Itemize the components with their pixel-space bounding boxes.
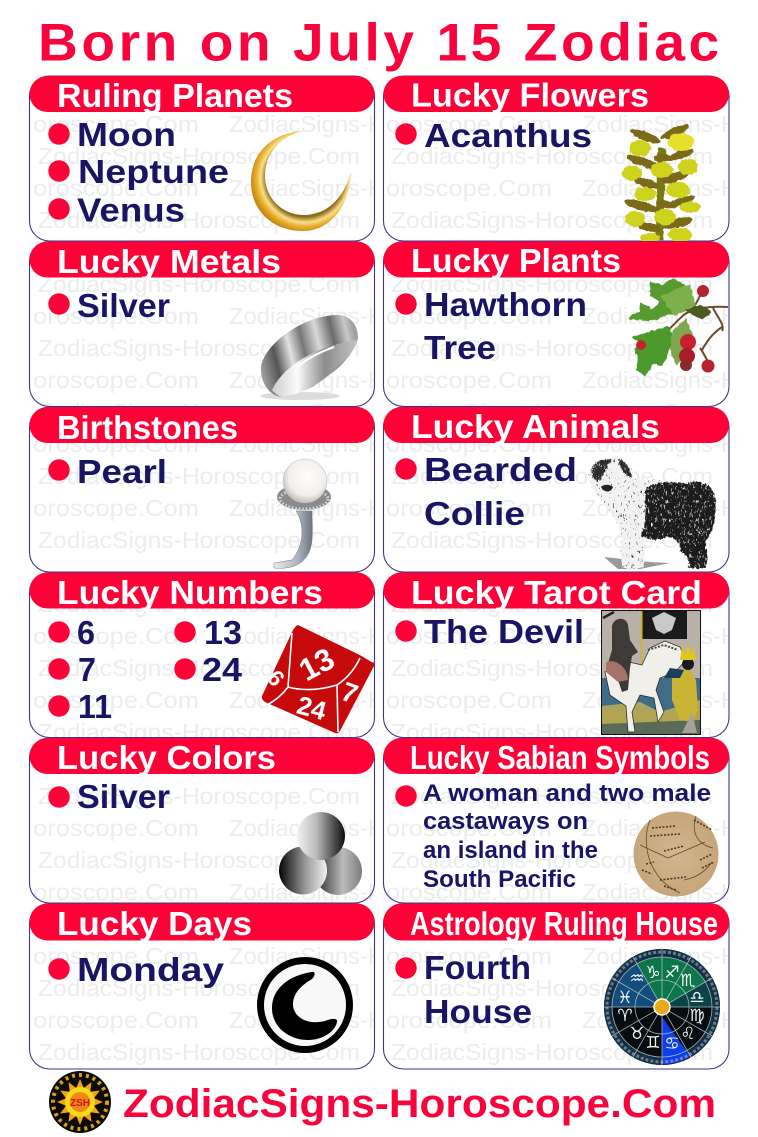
icon: hawthorn branch [627, 278, 728, 376]
panel: lucky days [30, 904, 374, 1069]
list: numbers [48, 614, 243, 725]
watermark text pattern: ZodiacSigns-Horoscope.Com [391, 271, 713, 297]
icon: astrology chart [634, 812, 718, 896]
heading: lucky flowers [384, 76, 729, 114]
heading: ruling planets [30, 76, 374, 114]
icon: red dice: 13 [293, 641, 340, 688]
icon: tarot card [602, 610, 700, 734]
watermark text pattern: oroscope.Com [386, 111, 552, 137]
watermark text pattern: oroscope.Com [33, 815, 199, 841]
watermark text pattern: oroscope.Com [33, 431, 199, 457]
watermark text pattern: oroscope.Com [33, 111, 199, 137]
heading: lucky days: Lucky Days [57, 905, 252, 942]
watermark text pattern: ZodiacSigns-H [582, 175, 738, 201]
watermark text pattern: ZodiacSigns-Horoscope.Com [391, 847, 713, 873]
watermark text pattern: ZodiacSigns-Horoscope.Com [38, 527, 360, 553]
watermark text pattern: ZodiacSigns-H [229, 175, 385, 201]
watermark text pattern: ZodiacSigns-Horoscope.Com [38, 975, 360, 1001]
heading: lucky numbers: Lucky Numbers [57, 574, 323, 611]
watermark text pattern: ZodiacSigns-H [582, 303, 738, 329]
list: numbers: 6 [77, 614, 95, 651]
watermark text pattern: oroscope.Com [386, 1007, 552, 1033]
watermark text pattern: ZodiacSigns-H [582, 431, 738, 457]
list: numbers: 7 [78, 651, 96, 688]
icon: zodiac house wheel: ♎ [689, 988, 705, 1008]
watermark text pattern: oroscope.Com [386, 623, 552, 649]
watermark text pattern: oroscope.Com [386, 815, 552, 841]
panel: lucky flowers [384, 76, 729, 243]
list: numbers: 24 [202, 651, 243, 688]
watermark text pattern: ZodiacSigns-H [582, 495, 738, 521]
icon: zodiac house wheel [604, 949, 720, 1065]
watermark text pattern: ZodiacSigns-H [582, 623, 738, 649]
watermark text pattern: oroscope.Com [33, 175, 199, 201]
watermark text pattern: ZodiacSigns-H [229, 1007, 385, 1033]
watermark text pattern: oroscope.Com [33, 687, 199, 713]
list: house: Fourth [424, 949, 531, 986]
watermark text pattern [33, 111, 738, 1065]
list: numbers: 13 [204, 614, 242, 651]
watermark text pattern: ZodiacSigns-H [229, 111, 385, 137]
watermark text pattern: ZodiacSigns-H [229, 815, 385, 841]
heading: lucky plants: Lucky Plants [411, 242, 621, 279]
footer logo: ZSH [70, 1098, 90, 1109]
footer logo [49, 1071, 111, 1133]
watermark text pattern: oroscope.Com [386, 303, 552, 329]
panel: lucky sabian symbols [384, 738, 729, 903]
heading: lucky animals [384, 407, 729, 445]
watermark text pattern: ZodiacSigns-H [229, 687, 385, 713]
watermark text pattern: ZodiacSigns-Horoscope.Com [38, 399, 360, 425]
watermark text pattern: ZodiacSigns-Horoscope.Com [38, 463, 360, 489]
watermark text pattern: ZodiacSigns-Horoscope.Com [391, 335, 713, 361]
watermark text pattern: ZodiacSigns-Horoscope.Com [391, 655, 713, 681]
heading: lucky numbers [30, 572, 374, 611]
list: metals: Silver [77, 287, 170, 324]
icon: zodiac house wheel: ♊ [645, 1033, 661, 1053]
list: sabian symbol: castaways on [423, 808, 588, 835]
list: planets: Venus [77, 192, 185, 228]
panel: lucky colors [30, 738, 374, 903]
watermark text pattern: oroscope.Com [386, 495, 552, 521]
watermark text pattern: ZodiacSigns-H [582, 687, 738, 713]
watermark text pattern: ZodiacSigns-Horoscope.Com [38, 143, 360, 169]
heading: lucky colors [30, 738, 374, 776]
icon: gold crescent moon [251, 130, 351, 231]
heading: lucky animals: Lucky Animals [411, 408, 660, 445]
watermark text pattern: oroscope.Com [33, 879, 199, 905]
list: planets: Moon [77, 116, 176, 153]
watermark text pattern: ZodiacSigns-Horoscope.Com [38, 207, 360, 233]
watermark text pattern: ZodiacSigns-H [229, 623, 385, 649]
icon: zodiac house wheel: ♏ [680, 971, 696, 991]
watermark text pattern: ZodiacSigns-Horoscope.Com [391, 207, 713, 233]
watermark text pattern: ZodiacSigns-Horoscope.Com [391, 527, 713, 553]
heading: birthstones [30, 407, 374, 446]
icon: zodiac house wheel: ♓ [617, 988, 633, 1008]
panel: lucky animals [384, 407, 729, 572]
watermark text pattern: ZodiacSigns-H [582, 111, 738, 137]
watermark text pattern: ZodiacSigns-Horoscope.Com [38, 847, 360, 873]
list: planets: Neptune [78, 153, 229, 190]
list: animals [395, 451, 577, 532]
list: plants: Hawthorn [424, 286, 587, 323]
icon: zodiac house wheel: ♉ [629, 1024, 645, 1044]
watermark text pattern: ZodiacSigns-Horoscope.Com [391, 719, 713, 745]
list: house: House [424, 993, 532, 1030]
watermark text pattern: oroscope.Com [33, 303, 199, 329]
watermark text pattern: ZodiacSigns-H [582, 815, 738, 841]
list: animals: Bearded [424, 451, 577, 488]
watermark text pattern: ZodiacSigns-Horoscope.Com [391, 463, 713, 489]
icon: red dice: 6 [262, 665, 290, 691]
panel: astrology ruling house [384, 904, 729, 1069]
list: plants [395, 286, 587, 366]
watermark text pattern: ZodiacSigns-H [582, 879, 738, 905]
panel: lucky metals [30, 242, 374, 406]
watermark text pattern: oroscope.Com [33, 943, 199, 969]
watermark text pattern: ZodiacSigns-H [582, 367, 738, 393]
icon: moon badge [257, 957, 353, 1053]
panel: lucky tarot card [384, 572, 729, 738]
panel: birthstones [30, 407, 374, 572]
heading: lucky metals: Lucky Metals [57, 243, 281, 280]
watermark text pattern: oroscope.Com [33, 367, 199, 393]
watermark text pattern: oroscope.Com [386, 367, 552, 393]
watermark text pattern: oroscope.Com [386, 943, 552, 969]
icon: zodiac house wheel: ♐ [664, 963, 680, 983]
watermark text pattern: ZodiacSigns-H [582, 1007, 738, 1033]
icon: zodiac house wheel: ♌ [680, 1024, 696, 1044]
watermark text pattern: oroscope.Com [386, 175, 552, 201]
list: birthstones [48, 453, 167, 490]
watermark text pattern: oroscope.Com [386, 879, 552, 905]
list: flowers: Acanthus [424, 117, 592, 154]
list: house [395, 949, 532, 1030]
watermark text pattern: oroscope.Com [386, 687, 552, 713]
watermark text pattern: oroscope.Com [33, 1007, 199, 1033]
icon: red dice: 7 [337, 676, 362, 710]
icon: zodiac house wheel: ♍ [689, 1006, 705, 1026]
watermark text pattern: ZodiacSigns-Horoscope.Com [391, 399, 713, 425]
watermark text pattern: oroscope.Com [33, 495, 199, 521]
watermark text pattern: ZodiacSigns-Horoscope.Com [38, 271, 360, 297]
icon: silver spheres [279, 812, 362, 895]
list: plants: Tree [424, 329, 496, 366]
watermark text pattern: ZodiacSigns-H [229, 431, 385, 457]
heading: lucky colors: Lucky Colors [57, 739, 276, 776]
list: animals: Collie [424, 495, 525, 532]
watermark text pattern: ZodiacSigns-H [229, 495, 385, 521]
watermark text pattern: ZodiacSigns-Horoscope.Com [38, 1039, 360, 1065]
list: birthstones: Pearl [77, 453, 167, 490]
icon: bearded collie [589, 458, 716, 569]
footer website text: ZodiacSigns-Horoscope.Com [123, 1082, 716, 1126]
list: tarot: The Devil [424, 613, 584, 650]
list: sabian symbol [395, 780, 711, 893]
list: colors: Silver [77, 778, 170, 815]
watermark text pattern: ZodiacSigns-Horoscope.Com [38, 783, 360, 809]
list: numbers: 11 [78, 688, 112, 725]
heading: lucky metals [30, 242, 374, 280]
watermark text pattern: ZodiacSigns-Horoscope.Com [38, 591, 360, 617]
icon: zodiac house wheel: ♈ [617, 1006, 633, 1026]
watermark text pattern: ZodiacSigns-Horoscope.Com [38, 335, 360, 361]
heading: lucky tarot card: Lucky Tarot Card [411, 574, 702, 611]
watermark text pattern: ZodiacSigns-H [229, 367, 385, 393]
heading: birthstones: Birthstones [57, 409, 238, 446]
watermark text pattern: ZodiacSigns-H [229, 303, 385, 329]
watermark text pattern: ZodiacSigns-Horoscope.Com [38, 719, 360, 745]
watermark text pattern: ZodiacSigns-H [229, 879, 385, 905]
list: sabian symbol: an island in the [423, 837, 598, 864]
list: days: Monday [77, 951, 225, 988]
icon: silver ring [260, 315, 358, 400]
heading: lucky days [30, 904, 374, 942]
watermark text pattern: ZodiacSigns-Horoscope.Com [391, 591, 713, 617]
panel: lucky numbers [30, 572, 374, 738]
list: sabian symbol: A woman and two male [423, 780, 711, 807]
list: sabian symbol: South Pacific [423, 866, 576, 893]
panel: ruling planets [30, 76, 374, 241]
watermark text pattern: ZodiacSigns-Horoscope.Com [391, 975, 713, 1001]
heading: lucky plants [384, 242, 729, 279]
icon: acanthus flower [622, 122, 700, 243]
icon: zodiac house wheel: ♒ [629, 969, 645, 989]
watermark text pattern: oroscope.Com [33, 623, 199, 649]
watermark text pattern: ZodiacSigns-Horoscope.Com [391, 783, 713, 809]
icon: zodiac house wheel: ♋ [664, 1034, 680, 1054]
icon: zodiac house wheel: ♑ [645, 963, 661, 983]
watermark text pattern: ZodiacSigns-Horoscope.Com [38, 655, 360, 681]
watermark text pattern: ZodiacSigns-H [582, 943, 738, 969]
heading: ruling planets: Ruling Planets [57, 77, 293, 114]
title: Born on July 15 Zodiac [38, 13, 719, 72]
watermark text pattern: ZodiacSigns-H [229, 943, 385, 969]
watermark text pattern: ZodiacSigns-Horoscope.Com [391, 143, 713, 169]
heading: lucky flowers: Lucky Flowers [411, 76, 649, 114]
icon: red dice: 24 [294, 690, 330, 726]
list: planets [48, 116, 229, 228]
watermark text pattern: oroscope.Com [386, 431, 552, 457]
watermark text pattern: ZodiacSigns-Horoscope.Com [391, 1039, 713, 1065]
panel: lucky plants [384, 242, 729, 406]
icon: pearl ring [274, 459, 331, 568]
icon: red dice [262, 625, 374, 733]
